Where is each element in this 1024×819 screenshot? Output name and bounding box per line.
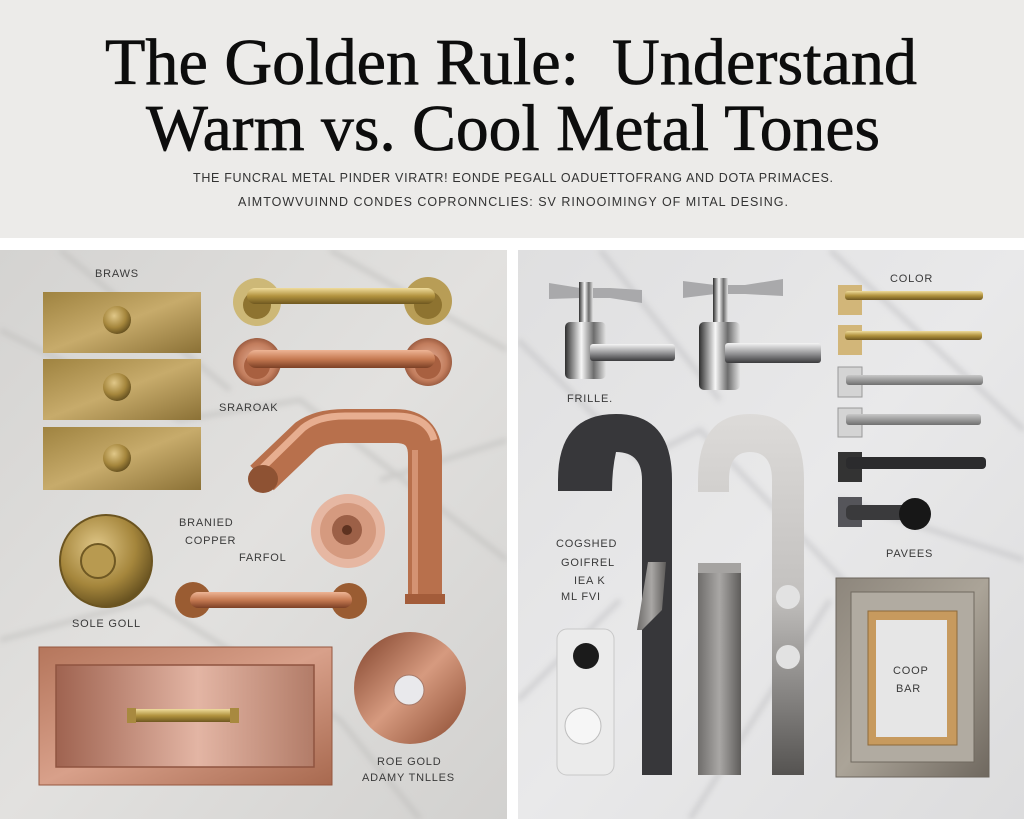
label: paves: PAVEES bbox=[886, 548, 933, 560]
title: The Golden Rule: Understand bbox=[105, 26, 917, 99]
rose gold disc with white button bbox=[354, 632, 466, 744]
label: finish: ML FVI bbox=[561, 591, 601, 603]
brass drawer plates bbox=[43, 292, 201, 490]
title bbox=[105, 26, 917, 165]
label: color: COLOR bbox=[890, 273, 933, 285]
rose gold drawer front bbox=[39, 647, 332, 785]
label: sole gold: SOLE GOLL bbox=[72, 618, 141, 630]
label: brushed copper: COPPER bbox=[185, 535, 236, 547]
brushed steel arch pull bbox=[698, 414, 804, 775]
label: rose gold: ROE GOLD bbox=[377, 756, 441, 768]
label: brushed copper: BRANIED bbox=[179, 517, 234, 529]
label: finish bbox=[556, 538, 617, 603]
copper escutcheon bbox=[311, 494, 385, 568]
steel lever bbox=[637, 562, 666, 630]
label: coop bar: COOP bbox=[893, 665, 929, 677]
white doorbell plate bbox=[557, 629, 614, 775]
label: rose gold: ADAMY TNLLES bbox=[362, 772, 455, 784]
chrome faucet 1 bbox=[549, 282, 675, 379]
picture frame bbox=[836, 578, 989, 777]
brass round knob bbox=[60, 515, 152, 607]
label: brass: BRAWS bbox=[95, 268, 139, 280]
title: Warm vs. Cool Metal Tones bbox=[146, 92, 880, 165]
label: brushed copper bbox=[179, 517, 236, 547]
label: farfol: FARFOL bbox=[239, 552, 287, 564]
panel: warm metals bbox=[0, 250, 507, 819]
label: coop bar: BAR bbox=[896, 683, 921, 695]
panel: cool metals bbox=[518, 250, 1024, 819]
small pulls stack bbox=[838, 285, 986, 530]
header band bbox=[0, 0, 1024, 238]
copper faucet bbox=[248, 416, 445, 604]
subtitle: AIMTOWVUINND CONDES COPRONNCLIES: SV RINOOIMINGY OF MITAL DESING. bbox=[238, 195, 788, 209]
brass bar handle bbox=[233, 277, 452, 326]
label: frille: FRILLE. bbox=[567, 393, 613, 405]
label: finish: IEA K bbox=[574, 575, 606, 587]
label: coop bar bbox=[893, 665, 929, 695]
chrome faucet 2 bbox=[683, 278, 821, 390]
label: rose gold bbox=[362, 756, 455, 784]
subtitle: THE FUNCRAL METAL PINDER VIRATR! EONDE PEGALL OADUETTOFRANG AND DOTA PRIMACES. bbox=[193, 171, 833, 185]
label: sample: SRAROAK bbox=[219, 402, 278, 414]
label: finish: COGSHED bbox=[556, 538, 617, 550]
matte black arch pull bbox=[558, 414, 672, 775]
steel plate bbox=[698, 563, 741, 775]
label: finish: GOIFREL bbox=[561, 557, 615, 569]
small copper pull bbox=[175, 582, 367, 619]
subtitle bbox=[193, 171, 833, 209]
copper bar handle bbox=[233, 338, 452, 386]
